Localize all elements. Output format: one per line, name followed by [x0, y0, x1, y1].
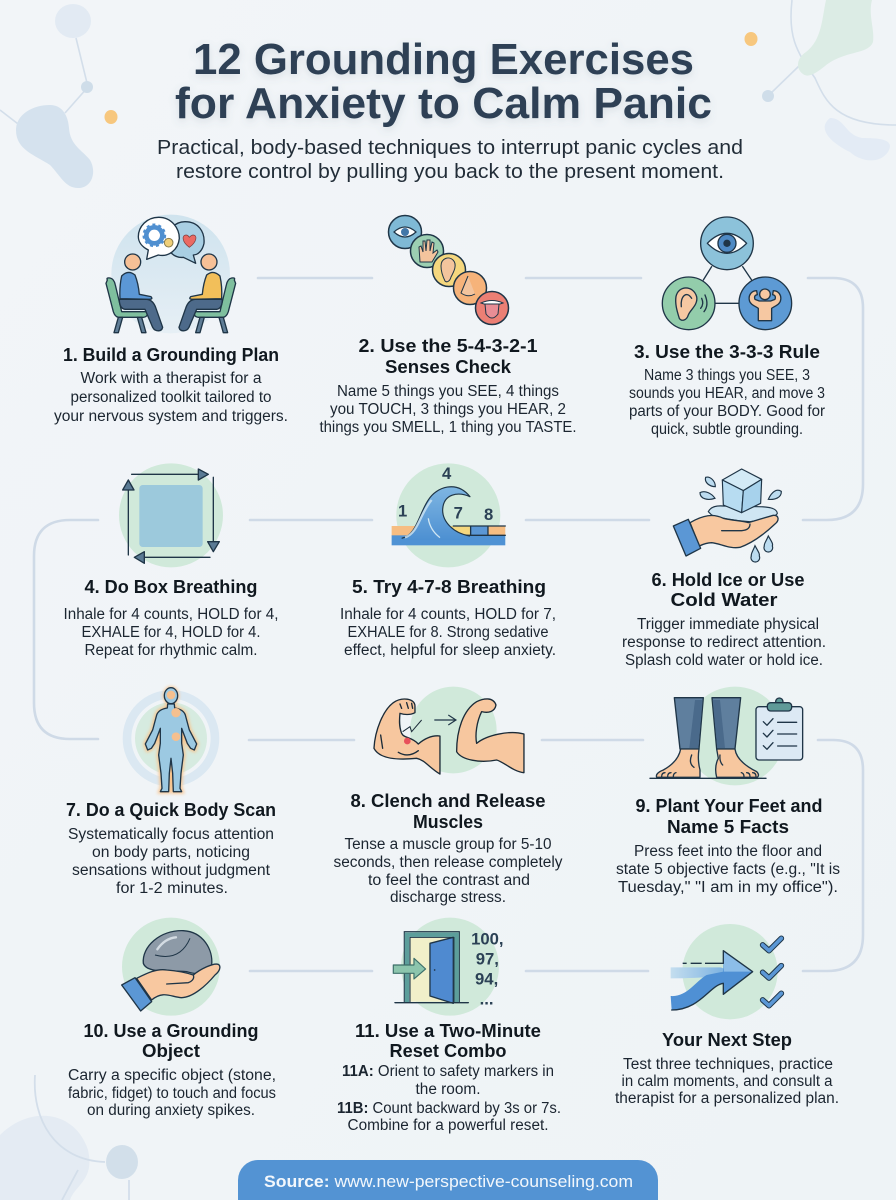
icon: wave with 4-7-8 numbers: 4 — [442, 464, 452, 483]
panel: step 6 hold ice — [622, 469, 826, 669]
connector: step 9 around to next step — [803, 740, 863, 971]
panel: your next step — [615, 924, 839, 1107]
decoration: top left molecule — [0, 4, 93, 188]
description: next step: in calm moments, and consult a — [622, 1073, 833, 1090]
description: step 8: Tense a muscle group for 5-10 — [344, 836, 552, 853]
heading: step 2: Senses Check — [385, 356, 512, 377]
panel: step 3 the 3-3-3 rule — [629, 217, 825, 438]
heading: step 9 — [636, 795, 822, 837]
description: step 3: quick, subtle grounding. — [651, 421, 803, 438]
description: step 5: Inhale for 4 counts, HOLD for 7, — [340, 606, 556, 623]
description: step 6: response to redirect attention. — [622, 634, 826, 651]
icon: wave with 4-7-8 numbers — [392, 463, 505, 567]
icon: eye, ear and muscle triangle — [662, 217, 792, 330]
description: step 3: Name 3 things you SEE, 3 — [644, 367, 810, 384]
heading: step 3: 3. Use the 3-3-3 Rule — [634, 341, 820, 362]
description: step 4: Repeat for rhythmic calm. — [84, 642, 258, 659]
connector: row one, step 2 to 3 — [526, 277, 641, 279]
description: step 8: seconds, then release completely — [334, 854, 563, 871]
icon: door, arrow and countdown numbers: 97, — [476, 950, 499, 969]
title: 12 Grounding Exercises — [193, 35, 694, 84]
connector: row two, step 5 to 4 — [250, 519, 372, 521]
description: next step: therapist for a personalized plan. — [615, 1090, 839, 1107]
heading: step 6 — [652, 569, 804, 610]
heading: step 9: Name 5 Facts — [667, 816, 789, 837]
description: step 2: things you SMELL, 1 thing you TASTE. — [320, 419, 576, 436]
description: step 5: EXHALE for 8. Strong sedative — [348, 624, 548, 641]
heading: step 8: 8. Clench and Release — [350, 790, 546, 811]
description: step 6: Trigger immediate physical — [637, 616, 819, 633]
heading: step 10: 10. Use a Grounding — [84, 1020, 258, 1041]
description: step 7: sensations without judgment — [72, 862, 271, 879]
heading: step 9: 9. Plant Your Feet and — [636, 795, 822, 816]
description: step 2 — [320, 383, 576, 436]
panel: step 7 quick body scan — [66, 686, 276, 897]
description: step 9 — [616, 843, 840, 896]
description: step 1: your nervous system and triggers. — [54, 408, 288, 425]
heading: step 2: 2. Use the 5-4-3-2-1 — [358, 335, 538, 356]
icon: merging arrows with check marks — [671, 924, 781, 1019]
icon: five senses chain — [388, 216, 508, 324]
description: step 9: Press feet into the floor and — [634, 843, 822, 860]
heading: step 8: Muscles — [413, 811, 483, 832]
description: step 5 — [340, 606, 556, 659]
icon: hand holding ice cube — [673, 469, 781, 562]
panel: step 2 senses check — [320, 216, 576, 436]
decoration: bottom left molecule — [0, 1075, 138, 1200]
description: step 8: discharge stress. — [390, 889, 506, 906]
description: step 11: Combine for a powerful reset. — [348, 1117, 548, 1134]
description: step 4: Inhale for 4 counts, HOLD for 4, — [64, 606, 278, 623]
panel: step 11 two-minute reset combo — [337, 918, 561, 1134]
panel: step 10 grounding object — [68, 918, 276, 1119]
heading: step 8 — [350, 790, 546, 832]
heading: step 11: Reset Combo — [390, 1040, 506, 1061]
description: step 2: Name 5 things you SEE, 4 things — [337, 383, 559, 400]
heading: step 2 — [358, 335, 538, 377]
description: step 9: Tuesday," "I am in my office"). — [618, 879, 838, 896]
description: step 5: effect, helpful for sleep anxiety. — [344, 642, 556, 659]
description: step 11: 11B: Count backward by 3s or 7s. — [337, 1100, 561, 1117]
heading: step 6: 6. Hold Ice or Use — [652, 569, 804, 590]
icon: box breathing square with arrows — [119, 463, 223, 567]
icon: wave with 4-7-8 numbers: 8 — [484, 505, 493, 524]
description: step 9: state 5 objective facts (e.g., "It is — [616, 861, 840, 878]
description: step 4 — [64, 606, 278, 659]
description: step 10: on during anxiety spikes. — [87, 1102, 255, 1119]
description: step 7: for 1-2 minutes. — [116, 880, 228, 897]
description: step 11: 11A: Orient to safety markers in — [342, 1063, 554, 1080]
connector: step 4 around to step 7 — [34, 520, 98, 739]
connector: row four, next step to 11 — [526, 970, 648, 972]
heading: step 6: Cold Water — [670, 589, 778, 610]
subtitle: restore control by pulling you back to the present moment. — [176, 161, 724, 183]
icon: glowing body outline — [127, 686, 215, 792]
description: step 4: EXHALE for 4, HOLD for 4. — [82, 624, 260, 641]
title: for Anxiety to Calm Panic — [175, 79, 712, 128]
description: step 11: the room. — [416, 1081, 480, 1098]
description: step 3 — [629, 367, 825, 438]
source banner: Source: www.new-perspective-counseling.com — [264, 1172, 633, 1191]
panel: step 9 plant your feet — [616, 687, 840, 896]
panel: step 4 box breathing — [64, 463, 278, 659]
description: step 11 — [337, 1063, 561, 1134]
heading: step 1: 1. Build a Grounding Plan — [63, 344, 279, 365]
description: step 3: parts of your BODY. Good for — [629, 403, 825, 420]
connector: step 3 around to step 6 — [803, 278, 863, 520]
description: step 6: Splash cold water or hold ice. — [625, 652, 823, 669]
decoration: top right orange dot — [744, 32, 758, 46]
decoration: top left orange dot — [104, 110, 118, 124]
icon: feet on floor with checklist — [650, 687, 803, 785]
panel: step 1 build a grounding plan — [54, 215, 288, 425]
subtitle — [157, 137, 743, 183]
heading: step 10 — [84, 1020, 258, 1061]
description: step 2: you TOUCH, 3 things you HEAR, 2 — [330, 401, 566, 418]
connector: row three, step 8 to 9 — [542, 739, 643, 741]
description: step 1 — [54, 370, 288, 425]
description: step 1: personalized toolkit tailored to — [70, 389, 272, 406]
description: step 3: sounds you HEAR, and move 3 — [629, 385, 825, 402]
icon: tensed and relaxed arm — [374, 687, 524, 774]
heading: step 11: 11. Use a Two-Minute — [355, 1020, 541, 1041]
icon: hand holding a stone — [122, 918, 220, 1016]
heading: step 4: 4. Do Box Breathing — [84, 576, 258, 597]
icon: two people in therapy talking — [106, 215, 236, 333]
description: step 8 — [334, 836, 563, 906]
source banner — [238, 1160, 658, 1200]
panel: step 5 4-7-8 breathing — [340, 463, 556, 659]
icon: wave with 4-7-8 numbers: 7 — [454, 503, 463, 522]
panel: step 8 clench and release — [334, 687, 563, 906]
description: next step — [615, 1056, 839, 1107]
heading: step 11 — [355, 1020, 541, 1061]
description: step 10: Carry a specific object (stone, — [68, 1067, 276, 1084]
description: step 7 — [68, 826, 274, 897]
decoration: top right molecule — [762, 0, 896, 160]
description: step 8: to feel the contrast and — [368, 872, 530, 889]
description: step 10: fabric, fidget) to touch and focus — [68, 1085, 276, 1102]
description: step 7: Systematically focus attention — [68, 826, 274, 843]
icon: door, arrow and countdown numbers: ... — [480, 990, 494, 1009]
connector: row four, step 11 to 10 — [250, 970, 372, 972]
title — [175, 35, 712, 128]
icon: wave with 4-7-8 numbers: 1 — [398, 501, 407, 520]
heading: step 10: Object — [142, 1040, 200, 1061]
description: step 1: Work with a therapist for a — [80, 370, 262, 387]
icon: door, arrow and countdown numbers — [393, 918, 504, 1016]
connector: row two, step 6 to 5 — [526, 519, 649, 521]
icon: door, arrow and countdown numbers: 94, — [475, 970, 498, 989]
description: step 6 — [622, 616, 826, 669]
subtitle: Practical, body-based techniques to interrupt panic cycles and — [157, 137, 743, 159]
description: next step: Test three techniques, practice — [623, 1056, 833, 1073]
heading: step 7: 7. Do a Quick Body Scan — [66, 799, 276, 820]
icon: door, arrow and countdown numbers: 100, — [471, 930, 504, 949]
connector: row one, step 1 to 2 — [258, 277, 372, 279]
description: step 10 — [68, 1067, 276, 1119]
connector: row three, step 7 to 8 — [249, 739, 354, 741]
description: step 7: on body parts, noticing — [92, 844, 250, 861]
heading: step 5: 5. Try 4-7-8 Breathing — [352, 576, 546, 597]
heading: next step: Your Next Step — [662, 1029, 792, 1050]
